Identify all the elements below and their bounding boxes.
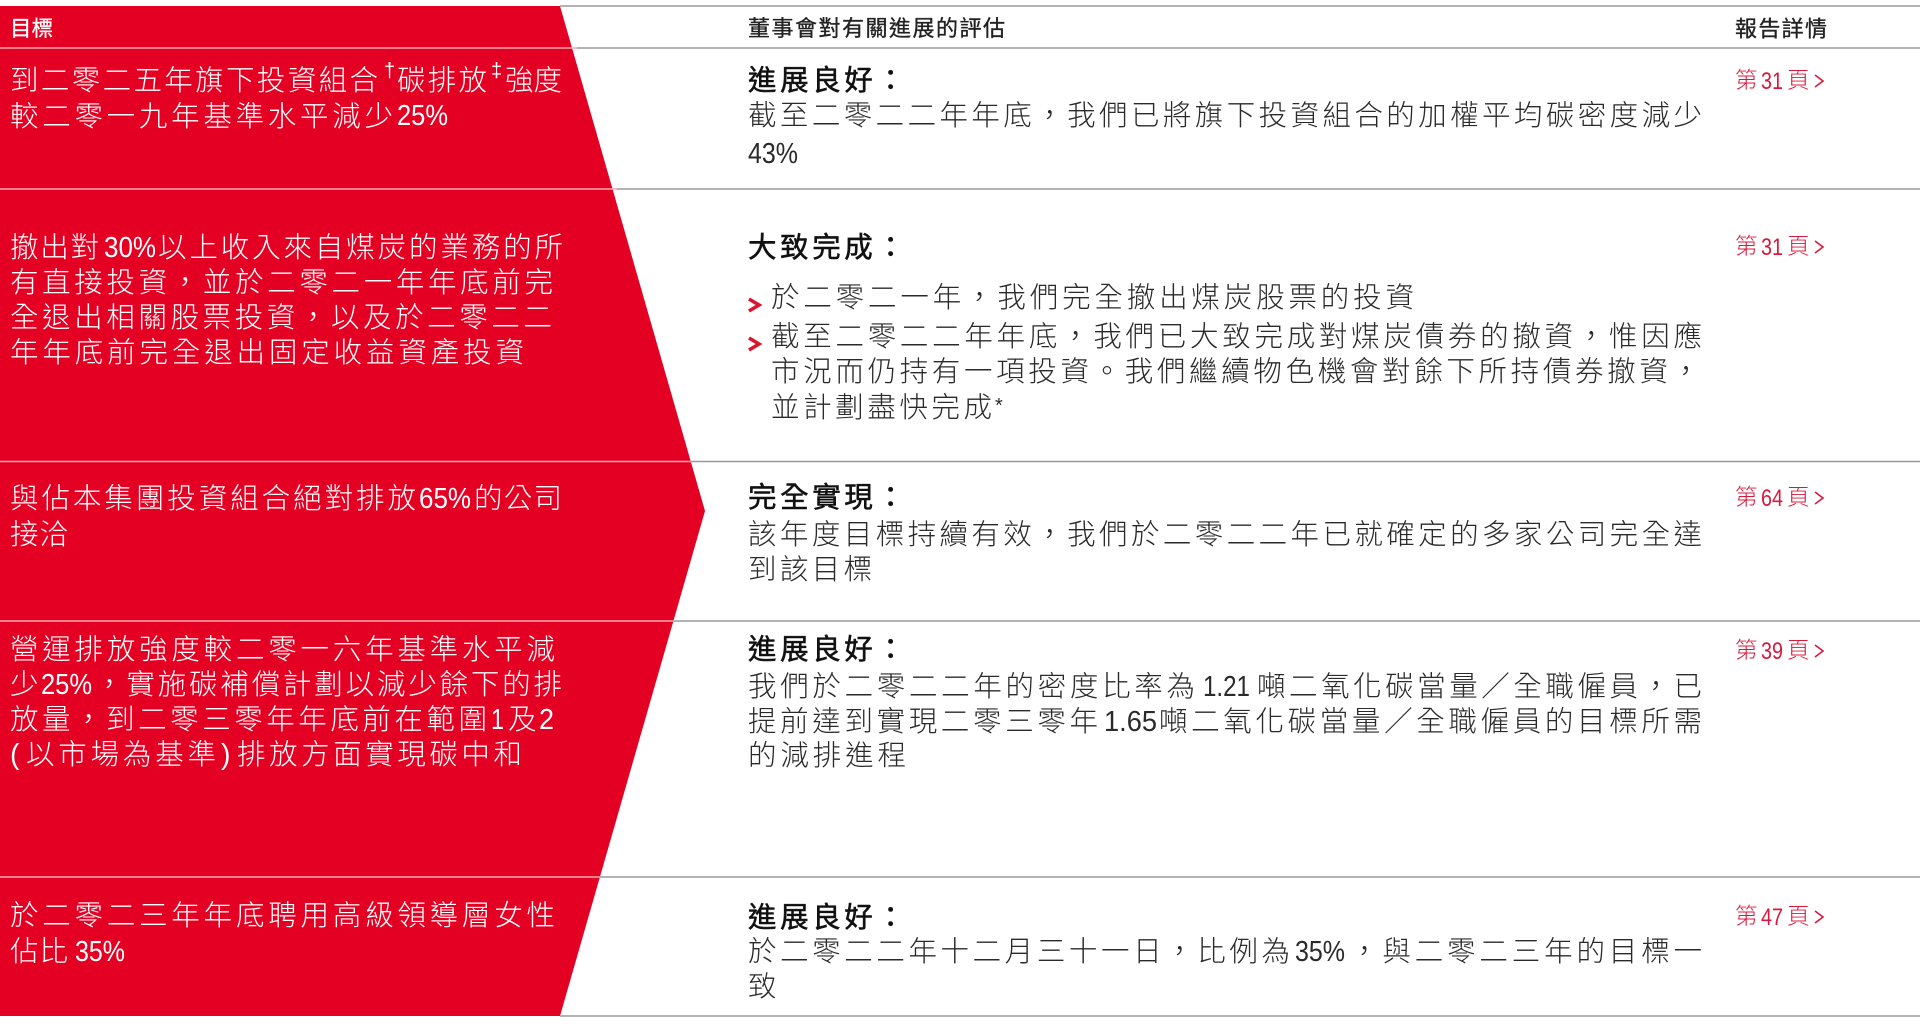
assessment text bbox=[748, 634, 1702, 772]
page link: 64 bbox=[1761, 485, 1783, 512]
page link: 頁 bbox=[1787, 68, 1810, 93]
page link bbox=[1735, 68, 1823, 95]
assessment text bbox=[748, 232, 1702, 424]
assessment text: * bbox=[995, 395, 1003, 417]
heading: objectives: 目標 bbox=[10, 17, 53, 41]
assessment text: 噸二氧化碳當量／全職僱員的目標所需 bbox=[1159, 706, 1702, 738]
page link: 頁 bbox=[1787, 234, 1810, 259]
objective text: 以上收入來自煤炭的業務的所 bbox=[158, 232, 563, 264]
assessment text: 1.65 bbox=[1104, 706, 1157, 738]
objective text bbox=[10, 634, 562, 771]
objective text bbox=[10, 60, 562, 133]
objective text: ，實施碳補償計劃以減少餘下的排 bbox=[95, 669, 562, 701]
assessment text: 於二零二二年十二月三十一日，比例為 bbox=[748, 936, 1290, 968]
assessment text: 的減排進程 bbox=[748, 740, 906, 772]
objective text: 撤出對 bbox=[10, 232, 99, 264]
page link: 31 bbox=[1761, 234, 1783, 261]
assessment text: 截至二零二二年年底，我們已將旗下投資組合的加權平均碳密度減少 bbox=[748, 100, 1702, 132]
objective text: 1 bbox=[491, 704, 504, 736]
row 5: women in senior leadership bbox=[10, 900, 1823, 1003]
objective text: 年年底前完全退出固定收益資產投資 bbox=[10, 337, 524, 369]
assessment text: 進展良好： bbox=[748, 902, 909, 934]
heading: report details: 報告詳情 bbox=[1735, 16, 1827, 42]
objective text: ( bbox=[10, 739, 20, 771]
assessment text: 我們於二零二二年的密度比率為 bbox=[748, 671, 1195, 703]
page link bbox=[1735, 904, 1823, 931]
assessment text: 43% bbox=[748, 138, 798, 170]
assessment text: ，與二零二三年的目標一 bbox=[1350, 936, 1702, 968]
assessment text: 市況而仍持有一項投資。我們繼續物色機會對餘下所持債券撤資， bbox=[771, 356, 1700, 388]
page link: 頁 bbox=[1787, 638, 1810, 663]
assessment text: 噸二氧化碳當量／全職僱員，已 bbox=[1257, 671, 1702, 703]
objective text: 65% bbox=[419, 483, 471, 515]
assessment text: 到該目標 bbox=[748, 554, 872, 586]
assessment text bbox=[748, 65, 1702, 170]
objective text: 與佔本集團投資組合絕對排放 bbox=[10, 483, 416, 515]
objective text: 30% bbox=[104, 232, 156, 264]
assessment text bbox=[748, 482, 1702, 586]
objective text: 全退出相關股票投資，以及於二零二二 bbox=[10, 302, 552, 334]
objective text: 及 bbox=[508, 704, 537, 736]
page link: 31 bbox=[1761, 68, 1783, 95]
objective text bbox=[10, 232, 563, 369]
row 3: company engagement bbox=[10, 482, 1823, 586]
assessment text: 35% bbox=[1295, 936, 1345, 968]
objective text: 放量，到二零三零年年底前在範圍 bbox=[10, 704, 487, 736]
page link: 頁 bbox=[1787, 904, 1810, 929]
page link: 47 bbox=[1761, 904, 1783, 931]
page link bbox=[1735, 485, 1823, 512]
assessment text: 提前達到實現二零三零年 bbox=[748, 706, 1098, 738]
objective text: 25% bbox=[397, 100, 448, 132]
row 2: coal divestment bbox=[10, 232, 1823, 424]
assessment text: 進展良好： bbox=[748, 65, 909, 97]
page link: 第 bbox=[1735, 68, 1758, 93]
objective text: 碳排放 bbox=[397, 65, 487, 97]
page link: 頁 bbox=[1787, 485, 1810, 510]
objective text: 35% bbox=[75, 936, 125, 968]
objective text: 有直接投資，並於二零二一年年底前完 bbox=[10, 267, 553, 299]
assessment text: 並計劃盡快完成 bbox=[771, 392, 992, 424]
assessment text: 於二零二一年，我們完全撤出煤炭股票的投資 bbox=[771, 282, 1414, 314]
objective text: 的公司 bbox=[474, 483, 562, 515]
assessment text bbox=[748, 902, 1702, 1003]
page link: 第 bbox=[1735, 904, 1758, 929]
page link bbox=[1735, 638, 1823, 665]
objective text: 較二零一九年基準水平減少 bbox=[10, 101, 393, 133]
objective text: ) bbox=[221, 739, 230, 771]
objective text: 接洽 bbox=[10, 519, 68, 551]
page link: 第 bbox=[1735, 234, 1758, 259]
objective text bbox=[10, 900, 555, 968]
objective text: 到二零二五年旗下投資組合 bbox=[10, 65, 378, 97]
assessment text: 大致完成： bbox=[748, 232, 909, 264]
objective text: 佔比 bbox=[10, 936, 68, 968]
assessment text: 1.21 bbox=[1203, 671, 1250, 703]
objective text: 於二零二三年年底聘用高級領導層女性 bbox=[10, 900, 555, 932]
assessment text: 進展良好： bbox=[748, 634, 909, 666]
page link: 39 bbox=[1761, 638, 1783, 665]
panel: red objectives chevron bbox=[0, 6, 705, 1016]
page link bbox=[1735, 234, 1823, 261]
assessment text: 該年度目標持續有效，我們於二零二二年已就確定的多家公司完全達 bbox=[748, 519, 1702, 551]
objective text: 25% bbox=[41, 669, 92, 701]
objective text: 2 bbox=[539, 704, 554, 736]
assessment text: 完全實現： bbox=[748, 482, 909, 514]
objective text: 強度 bbox=[505, 65, 562, 97]
heading: board assessment: 董事會對有關進展的評估 bbox=[748, 16, 1005, 41]
table header row bbox=[10, 16, 1827, 42]
page link: 第 bbox=[1735, 485, 1758, 510]
assessment text: 截至二零二二年年底，我們已大致完成對煤炭債券的撤資，惟因應 bbox=[771, 321, 1702, 353]
row 4: operational emissions bbox=[10, 634, 1823, 772]
icon: bullet chevrons bbox=[749, 299, 759, 350]
objective text: † bbox=[384, 60, 395, 82]
objective text: 少 bbox=[10, 669, 39, 701]
objective text: 以市場為基準 bbox=[26, 739, 216, 771]
objective text: 排放方面實現碳中和 bbox=[237, 739, 522, 771]
objective text: ‡ bbox=[491, 60, 502, 82]
assessment text: 致 bbox=[748, 971, 777, 1003]
objective text bbox=[10, 483, 562, 551]
page link: 第 bbox=[1735, 638, 1758, 663]
objective text: 營運排放強度較二零一六年基準水平減 bbox=[10, 634, 555, 666]
row 1: portfolio carbon intensity bbox=[10, 60, 1823, 170]
